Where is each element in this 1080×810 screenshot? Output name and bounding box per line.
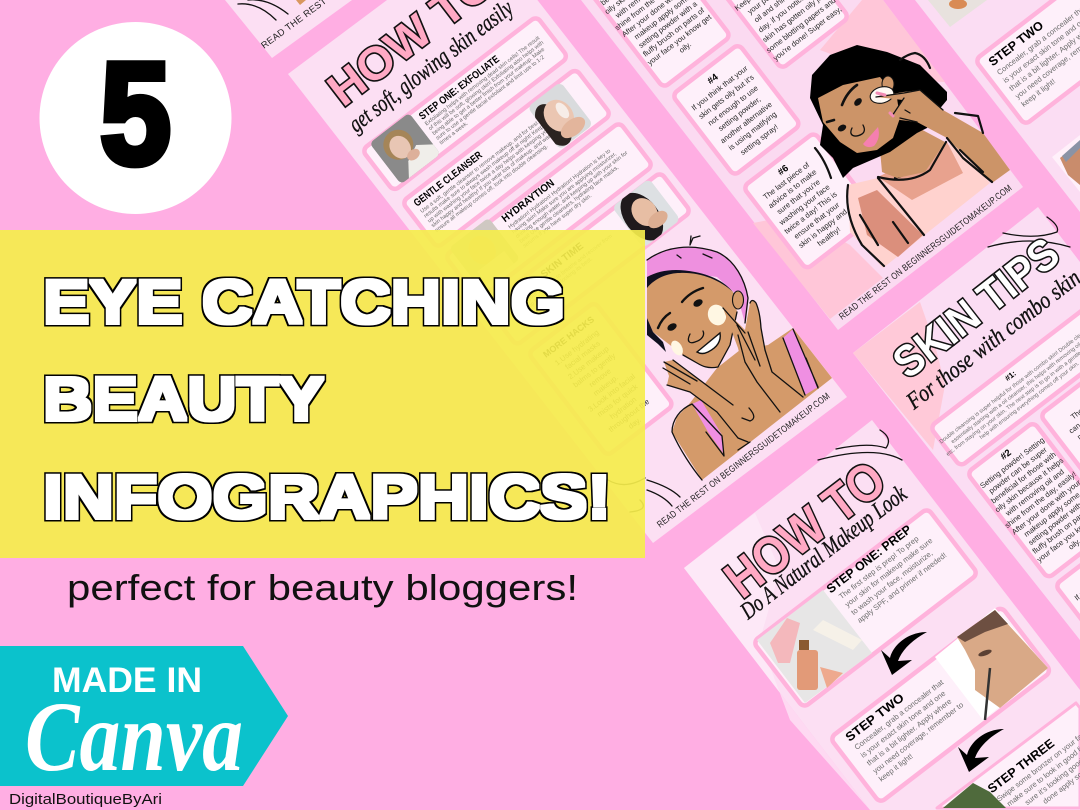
white circle with number 5: 5 [100,32,171,194]
card: step one prep: The first step is prep! To prep [837,534,920,601]
arrow: to step two [881,632,927,675]
card: tip 2: with removing oil and [1003,467,1066,518]
card: step one prep: STEP ONE: PREP [824,522,914,596]
card: step one exfoliate [361,15,568,191]
card: step one prep: your skin for makeup make sure [843,536,934,609]
main headline [43,268,611,531]
white circle with number 5 [40,22,232,214]
card: tip 2: powder can be super [987,445,1049,495]
card: hydraytion: Hydration! Hydration! Hydration! Hydration is key to [507,148,612,230]
text: read the rest: READ THE REST ON BEGINNERSGUIDETOMAKEUP.COM [837,182,1014,322]
card: step two: keep it light! [877,752,915,783]
card: hydraytion: best! Use gentle cleansers, hydrating face masks, [518,165,620,245]
sheet: oily skin tips with woman illustration [565,0,1023,330]
card: step two: that is a bit lighter. Apply where [865,697,953,768]
card: gentle cleanser [402,69,611,248]
card: tip 1: #1: [1003,369,1018,383]
shop credit: DigitalBoutiqueByAri [9,792,162,808]
card: gentle cleanser: up with washing your face twice a day helps with keeping your [427,126,553,224]
card: tip 6: ensure that your [792,200,842,241]
card: tip 4: another alternative [718,100,774,145]
card: step one exfoliate: of this will be soft, glowing skin! Exfoliating also helps with [428,40,545,132]
card: setting powder tip: setting powder with a [637,0,699,50]
card: gentle cleanser: skin happy and healthy! If you wear lots of makeup, and want to [430,128,559,229]
card: more hacks: day. [626,415,643,431]
card: tip 2: makeup apply some [1022,490,1080,539]
subtitle: do a natural makeup look: Do A Natural Makeup Look [735,481,912,625]
card: setting powder tip [565,0,731,89]
card: more hacks: 1.Use hydrating [553,328,601,367]
card: tip 2: beneficial for those with [989,450,1058,505]
card: tip 6: #6 [776,163,791,178]
card: tip 6: twice a day! This is [782,189,839,236]
card: step three [937,703,1080,810]
card: tip 6: skin is happy and [797,207,849,250]
badge: made in canva [0,646,288,792]
card: tip 1: help with ensuring everything comes off your skin. [979,361,1080,441]
photo: woman with cream [530,84,591,148]
main headline: BEAUTY [43,365,324,433]
card: step two: is your exact skin tone and one [859,689,947,760]
card: skin time: SKIN TIME [539,241,586,280]
text: step three [985,711,1080,810]
card: gentle cleanser: GENTLE CLEANSER [412,149,485,209]
yellow banner [0,230,645,558]
card: step one exfoliate: sure to use a gentle facial exfoliant and limit use to 1-2 [435,55,546,142]
card: tip 4 [672,44,801,176]
card: more hacks: mists for quick [595,382,639,419]
sheet: skin tips combo skin [853,207,1080,666]
photo: skincare bottles [757,590,872,703]
card: setting powder tip: fluffy brush on parts of [641,5,707,59]
card: tip 2: #2 [999,447,1014,463]
photo: smiling woman behind banner [472,220,498,230]
card: tip 6: washing your face [777,183,832,228]
text: step three: STEP THREE [985,736,1057,796]
main headline: EYE CATCHING [43,268,565,336]
card: step two: STEP TWO [843,690,907,744]
sheet: how to get soft glowing skin [288,0,847,543]
card: step two [975,0,1080,125]
photo: cropped outdoor [943,783,1006,808]
card: tip 2: oily skin because it helps [993,456,1065,514]
card: blotting papers tip: you're done! Super easy, [771,5,843,63]
card: tip 6 [743,132,878,270]
card: tip 4: setting spray! [739,122,780,157]
card: gentle cleanser: ensure all makeup comes off, look into double cleansing. [434,143,550,234]
card: tip 2: Setting powder! Setting [978,435,1046,490]
card: skin time: makeup helps keep it looking its best. [516,256,594,318]
badge: made in canva: Canva [25,681,243,792]
card: hydraytion: having skin! Make sure you are applying moisturizer, [511,151,618,235]
text: read the rest: READ THE REST ON BEGINNERSGUIDETOMAKEUP.COM [655,390,832,530]
card: step one prep: apply SPF, and primer if needed! [855,551,948,625]
card: step one exfoliate: being able to get a better finish from your makeup. Make [431,47,546,137]
card: tip 1 [927,305,1080,469]
card: tip 4: skin gets oily but it's [697,73,756,121]
card: step one prep: to wash your face, moisturize, [849,549,934,617]
card: more hacks: 3.Look into facial [586,372,637,414]
card: more hacks: remove [587,367,613,389]
photo: woman touching lip [369,113,441,184]
card: step one exfoliate: Exfoliating helps with removing dead skin cells! The result [424,35,541,127]
card: tip 6: healthy! [816,225,842,248]
illustration: woman applying face cream [608,236,832,512]
card: more hacks: throughout the [607,397,651,434]
photo: applying concealer [935,608,1048,720]
card: step two: Concealer, grab a concealer that [853,677,946,752]
card: more hacks: hydration [608,395,638,421]
arrow: to step three [958,729,1004,772]
card: step two [830,607,1051,803]
card: step two: you need coverage, remember to [871,700,965,775]
photo: cropped product [928,0,987,27]
card: more hacks: MORE HACKS [541,314,596,360]
heading: skin tips: SKIN TIPS [884,229,1069,388]
card: tip 6: The last piece of [761,160,812,201]
card: skin time [528,172,691,307]
card: hydraytion: serums if you have super dry skin. [522,193,593,250]
card: more hacks: facial masks [563,339,602,371]
card: hydraytion: HYDRAYTION [500,177,557,225]
card: tip 4: If you think that your [690,63,750,112]
main headline: INFOGRAPHICS! [43,463,611,531]
card: tip 4: is using matifying [727,110,778,152]
card: tip 4 cropped [1055,534,1080,666]
card: tip 2 [966,421,1080,580]
card: setting powder tip: your face you know get [646,12,714,67]
card: hydraytion [472,122,653,248]
card: setting powder tip: oily. [677,40,693,55]
card: gentle cleanser: Use a soft, gentle cleanser to remove makeup, and for best [419,120,540,215]
heading: how to: HOW TO [714,450,897,610]
card: step one exfoliate: STEP ONE: EXFOLIATE [417,53,502,123]
card: gentle cleanser: results make sure to always wash makeup off at night! Keeping [423,120,551,220]
card: hydraytion: drinking enough water, and keeping up with your skin for [515,150,629,240]
sheet: top right cropped [915,0,1080,212]
card: tip 6: sure that you're [775,177,822,216]
card: more hacks: 2.Use makeup [566,344,611,381]
card: tip 3 [1040,364,1080,521]
card: step one exfoliate: times a week. [439,120,470,146]
card: step two: keep it light! [1019,77,1057,109]
card: blotting papers tip [710,0,849,69]
card: tip 4: not enough to use [706,83,760,128]
card: more hacks [528,302,674,456]
card: step one prep [752,506,978,708]
tagline: perfect for beauty bloggers! [67,567,578,608]
sheet: how to do a natural makeup look [684,420,1080,810]
card: more hacks: makeup. [591,373,620,398]
card: more hacks: balms to gently [571,351,617,389]
photo: cropped face [1052,135,1080,192]
card: step two: STEP TWO [986,18,1046,69]
illustration: woman with cotton pad [810,45,1010,268]
photo: woman hand on cheek [614,180,678,246]
card: tip 6: advice is to make [766,167,818,210]
card: skin time: Giving your skin time to breathe and recover from [513,233,614,313]
card: tip 4: setting powder, [716,95,762,133]
card: tip 4: #4 [705,71,721,87]
card: tip 2: shine from the day, easily! [1003,470,1078,530]
badge: made in canva: MADE IN [52,661,202,700]
